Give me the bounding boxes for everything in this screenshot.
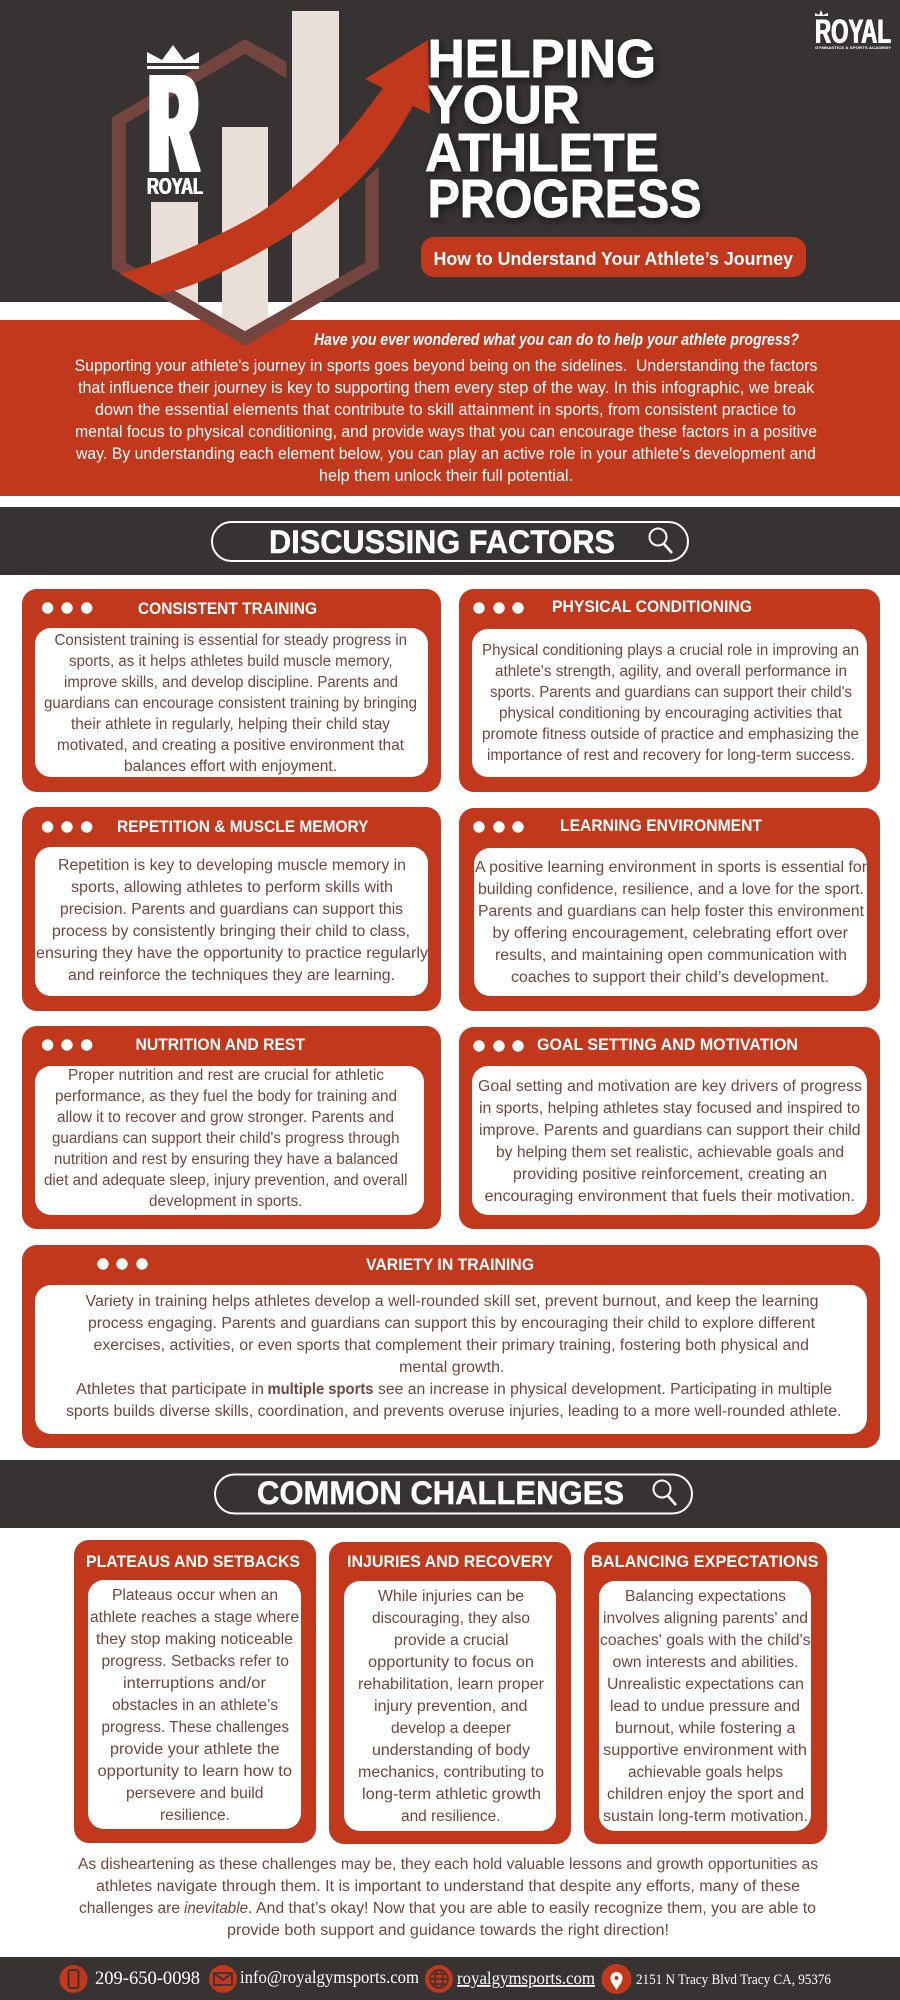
panel: learning environment: coaches to support their child’s development. [511, 969, 829, 986]
email: info@royalgymsports.com [240, 1967, 419, 1987]
panel: repetition and muscle memory: Repetition is key to developing muscle memory in [58, 857, 406, 874]
closing text block: athletes navigate through them. It is important to understand that despite any efforts, many of these [96, 1878, 800, 1895]
panel: plateaus and setbacks: persevere and build [126, 1785, 264, 1802]
panel: variety in training: exercises, activities, or even sports that complement their primary training, fostering both physical and [94, 1337, 809, 1354]
panel: learning environment [459, 808, 880, 1011]
panel: consistent training: improve skills, and develop discipline. Parents and [64, 674, 398, 691]
panel: nutrition and rest: nutrition and rest by ensuring they have a balanced [54, 1151, 398, 1168]
panel: nutrition and rest: performance, as they fuel the body for training and [55, 1088, 397, 1105]
panel: variety in training: process engaging. Parents and guardians can support this by encouraging their child to explore different [88, 1315, 816, 1332]
panel: balancing expectations: supportive environment with [603, 1742, 807, 1759]
panel: injuries and recovery [329, 1542, 571, 1844]
panel: goal setting and motivation: GOAL SETTING AND MOTIVATION [537, 1036, 798, 1054]
panel: variety in training: Variety in training helps athletes develop a well-rounded skill set, prevent burnout, and keep the learning [86, 1293, 818, 1310]
panel: injuries and recovery: long-term athletic growth [362, 1786, 541, 1803]
panel: plateaus and setbacks: progress. These challenges [102, 1719, 289, 1736]
section heading: Discussing Factors: DISCUSSING FACTORS [269, 524, 615, 560]
panel: repetition and muscle memory: precision. Parents and guardians can support this [60, 901, 403, 918]
title: PROGRESS [428, 169, 702, 229]
intro panel background [0, 320, 900, 496]
closing text block: challenges are [79, 1900, 180, 1917]
panel: consistent training: balances effort with enjoyment. [124, 758, 337, 775]
title: HELPING [428, 29, 656, 89]
panel: goal setting and motivation: improve. Parents and guardians can support their child [479, 1122, 860, 1139]
panel: injuries and recovery: understanding of body [372, 1742, 530, 1759]
panel: injuries and recovery: rehabilitation, learn proper [358, 1676, 544, 1693]
panel: variety in training: mental growth. [399, 1359, 504, 1376]
panel: goal setting and motivation: Goal setting and motivation are key drivers of progress [478, 1078, 862, 1095]
title: YOUR [428, 75, 580, 135]
panel: learning environment: by offering encouragement, celebrating effort over [492, 925, 848, 942]
panel: plateaus and setbacks: progress. Setbacks refer to [102, 1653, 289, 1670]
panel: injuries and recovery: INJURIES AND RECOVERY [347, 1553, 553, 1571]
panel: plateaus and setbacks: obstacles in an athlete’s [112, 1697, 278, 1714]
panel: injuries and recovery: injury prevention, and [374, 1698, 528, 1715]
icon: location pin [602, 1964, 632, 1994]
closing text block [78, 1856, 818, 1939]
panel: nutrition and rest: development in sports. [149, 1193, 302, 1210]
bar chart growth graphic [151, 11, 339, 342]
panel: variety in training [22, 1245, 880, 1448]
logo: Royal crown and R [147, 45, 203, 201]
intro text block: way. By understanding each element below, you can play an active role in your athlete's development and [75, 445, 816, 463]
panel: nutrition and rest: allow it to recover and grow stronger. Parents and [57, 1109, 394, 1126]
closing text block: inevitable [184, 1900, 248, 1917]
panel: balancing expectations: sustain long-term motivation. [603, 1808, 808, 1825]
footer contact bar [0, 1957, 900, 2000]
panel: learning environment: LEARNING ENVIRONMENT [560, 817, 762, 835]
panel: plateaus and setbacks: PLATEAUS AND SETBACKS [86, 1553, 300, 1571]
intro text block: Supporting your athlete's journey in sports goes beyond being on the sidelines. Understanding the factors [75, 357, 817, 375]
panel: plateaus and setbacks: provide your athlete the [110, 1741, 280, 1758]
panel: balancing expectations: children enjoy the sport and [607, 1786, 804, 1803]
panel: repetition and muscle memory [22, 807, 441, 1011]
panel: plateaus and setbacks: athlete reaches a stage where [90, 1609, 299, 1626]
panel: plateaus and setbacks: Plateaus occur when an [112, 1587, 278, 1604]
panel: nutrition and rest: diet and adequate sleep, injury prevention, and overall [44, 1172, 408, 1189]
panel: goal setting and motivation: providing positive reinforcement, creating an [513, 1166, 827, 1183]
title [425, 29, 702, 229]
panel: injuries and recovery: and resilience. [401, 1808, 500, 1825]
website: royalgymsports.com [457, 1968, 595, 1988]
panel: consistent training: CONSISTENT TRAINING [138, 600, 317, 618]
logo: Royal crown and R: R [150, 47, 197, 201]
panel: consistent training: sports, as it helps athletes build muscle memory, [69, 653, 393, 670]
subtitle pill: How to Understand Your Athlete’s Journey [434, 249, 793, 269]
panel: nutrition and rest: guardians can support their child's progress through [52, 1130, 400, 1147]
intro text block: help them unlock their full potential. [319, 467, 573, 485]
panel: consistent training: guardians can encourage consistent training by bringing [44, 695, 417, 712]
panel: physical conditioning: importance of rest and recovery for long-term success. [487, 747, 855, 764]
panel: injuries and recovery: While injuries can be [378, 1588, 524, 1605]
panel: nutrition and rest: Proper nutrition and rest are crucial for athletic [68, 1067, 384, 1084]
panel: nutrition and rest [22, 1026, 441, 1229]
icon: mail [209, 1965, 237, 1993]
panel: physical conditioning: athlete's strength, agility, and overall performance in [495, 663, 847, 680]
closing text block: . And that’s okay! Now that you are able to easily recognize them, you are able to [248, 1900, 816, 1917]
icon: magnifier [654, 1480, 676, 1505]
panel: nutrition and rest: NUTRITION AND REST [136, 1036, 305, 1054]
panel: physical conditioning: PHYSICAL CONDITIONING [552, 598, 752, 616]
intro text block: mental focus to physical conditioning, and provide ways that you can encourage these factors in a positive [75, 423, 817, 441]
panel: balancing expectations: lead to undue pressure and [610, 1698, 800, 1715]
panel: injuries and recovery: opportunity to focus on [368, 1654, 534, 1671]
panel: balancing expectations: Unrealistic expectations can [607, 1676, 804, 1693]
panel: variety in training: see an increase in physical development. Participating in multiple [378, 1381, 832, 1398]
panel: balancing expectations: achievable goals helps [628, 1764, 783, 1781]
panel: injuries and recovery: develop a deeper [391, 1720, 511, 1737]
subtitle pill [421, 237, 806, 277]
title: ATHLETE [425, 123, 659, 183]
icon: magnifier [650, 528, 672, 553]
panel: consistent training: Consistent training is essential for steady progress in [54, 632, 407, 649]
panel: repetition and muscle memory: ensuring they have the opportunity to practice regularly [36, 945, 428, 962]
panel: physical conditioning: physical conditioning by encouraging activities that [499, 705, 843, 722]
panel: plateaus and setbacks [74, 1540, 316, 1843]
panel: repetition and muscle memory: and reinforce the techniques they are learning. [68, 967, 395, 984]
logo: Royal crown and R: ROYAL [147, 173, 203, 199]
panel: plateaus and setbacks: opportunity to learn how to [98, 1763, 292, 1780]
panel: injuries and recovery: provide a crucial [394, 1632, 508, 1649]
panel: repetition and muscle memory: sports, allowing athletes to perform skills with [71, 879, 393, 896]
panel: goal setting and motivation: by helping them set realistic, achievable goals and [496, 1144, 844, 1161]
panel: balancing expectations: burnout, while fostering a [615, 1720, 796, 1737]
panel: learning environment: results, and maintaining open communication with [495, 947, 847, 964]
panel: physical conditioning: Physical conditioning plays a crucial role in improving an [482, 642, 859, 659]
panel: learning environment: Parents and guardians can help foster this environment [478, 903, 865, 920]
icon: phone [60, 1965, 88, 1993]
closing text block: provide both support and guidance towards the right direction! [227, 1922, 669, 1939]
panel: variety in training: multiple sports [268, 1381, 374, 1398]
panel: learning environment: A positive learning environment in sports is essential for [475, 859, 867, 876]
panel: balancing expectations: Balancing expectations [625, 1588, 786, 1605]
panel: balancing expectations: BALANCING EXPECTATIONS [591, 1553, 818, 1571]
panel: learning environment: building confidence, resilience, and a love for the sport. [478, 881, 864, 898]
panel: plateaus and setbacks: resilience. [160, 1807, 230, 1824]
panel: goal setting and motivation: encouraging environment that fuels their motivation. [484, 1188, 855, 1205]
panel: physical conditioning: promote fitness outside of practice and emphasizing the [482, 726, 859, 743]
panel: balancing expectations: involves aligning parents' and [603, 1610, 808, 1627]
panel: balancing expectations: coaches' goals with the child's [600, 1632, 811, 1649]
section heading: Common Challenges: COMMON CHALLENGES [257, 1475, 624, 1511]
section heading: Discussing Factors [0, 507, 900, 575]
panel: variety in training: VARIETY IN TRAINING [366, 1256, 534, 1274]
panel: variety in training: Athletes that participate in [76, 1381, 264, 1398]
intro text block: down the essential elements that contribute to skill attainment in sports, from consistent practice to [95, 401, 796, 419]
panel: consistent training [22, 589, 441, 792]
panel: repetition and muscle memory: process by consistently bringing their child to class, [52, 923, 410, 940]
section heading: Common Challenges [0, 1460, 900, 1528]
panel: goal setting and motivation [459, 1027, 880, 1229]
panel: injuries and recovery: mechanics, contributing to [358, 1764, 544, 1781]
icon: globe [425, 1965, 453, 1993]
panel: plateaus and setbacks: they stop making noticeable [96, 1631, 293, 1648]
panel: physical conditioning [459, 589, 880, 792]
closing text block: As disheartening as these challenges may be, they each hold valuable lessons and growth opportunities as [78, 1856, 818, 1873]
intro text block: Have you ever wondered what you can do to help your athlete progress? [314, 331, 799, 349]
address: 2151 N Tracy Blvd Tracy CA, 95376 [636, 1972, 831, 1988]
panel: balancing expectations: own interests and abilities. [612, 1654, 798, 1671]
panel: goal setting and motivation: in sports, helping athletes stay focused and inspired to [479, 1100, 860, 1117]
panel: consistent training: motivated, and creating a positive environment that [57, 737, 405, 754]
red rising arrow [120, 40, 430, 295]
panel: plateaus and setbacks: interruptions and/or [123, 1675, 266, 1692]
panel: injuries and recovery: discouraging, they also [372, 1610, 530, 1627]
panel: physical conditioning: sports. Parents and guardians can support their child's [490, 684, 852, 701]
intro text block [75, 331, 817, 485]
panel: repetition and muscle memory: REPETITION & MUSCLE MEMORY [117, 818, 368, 836]
hexagon outline [112, 40, 378, 345]
panel: balancing expectations [584, 1542, 827, 1844]
phone number: 209-650-0098 [95, 1968, 200, 1989]
top-right Royal logo: GYMNASTICS & SPORTS ACADEMY [815, 45, 891, 50]
header banner [0, 0, 900, 496]
panel: variety in training: sports builds diverse skills, coordination, and prevents overuse injuries, leading to a more well-rounded athlete. [66, 1403, 841, 1420]
intro text block: that influence their journey is key to supporting them every step of the way. In this infographic, we break [78, 379, 815, 397]
panel: consistent training: their athlete in regularly, helping their child stay [71, 716, 390, 733]
